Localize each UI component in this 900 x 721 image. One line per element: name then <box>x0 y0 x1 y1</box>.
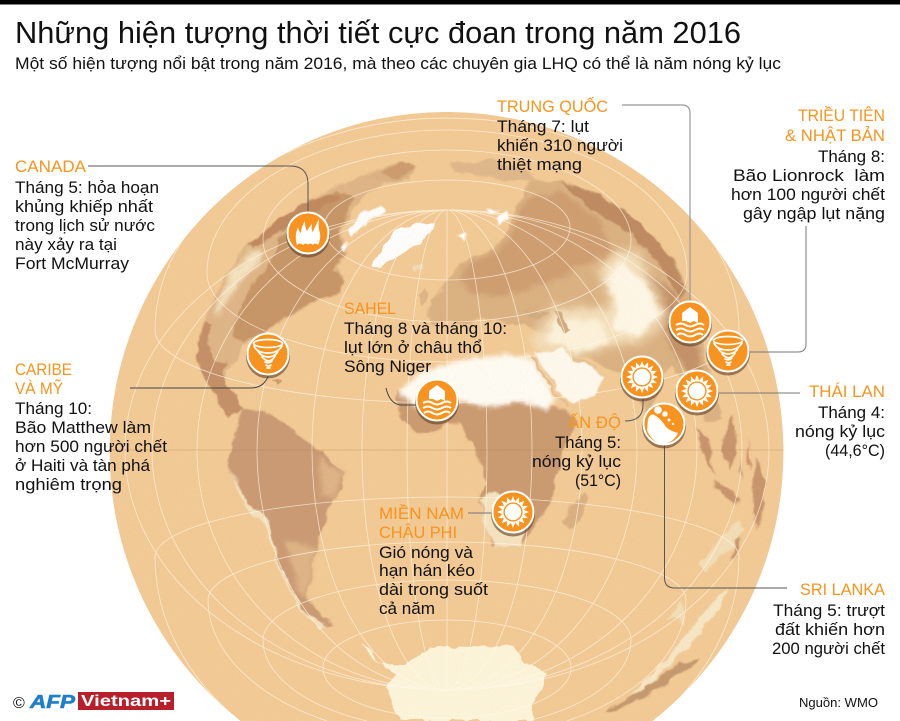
icon: flood China <box>668 302 712 346</box>
text block: Thailand: (44,6°C) <box>825 442 885 460</box>
text block: Caribbean and USA: Bão Matthew làm <box>15 419 151 437</box>
text block: Caribbean and USA: hơn 500 người chết <box>15 438 167 456</box>
text block: Thailand: Tháng 4: <box>818 404 885 422</box>
text block: Sahel: Tháng 8 và tháng 10: <box>344 320 507 338</box>
land masses <box>197 160 765 721</box>
text block: Canada: Fort McMurray <box>15 255 130 273</box>
logo: AFP Vietnam+: AFP <box>29 692 76 712</box>
text block: Thailand: THÁI LAN <box>809 382 885 401</box>
text block: Caribbean and USA <box>15 361 167 494</box>
connector lines <box>88 105 806 588</box>
text block: North Korea and Japan <box>731 106 885 223</box>
text block: Thailand <box>795 382 885 460</box>
Indonesia and the Philippines <box>695 413 765 530</box>
text block: Caribbean and USA: nghiêm trọng <box>15 476 122 494</box>
text block: North Korea and Japan: gây ngập lụt nặng <box>743 205 885 223</box>
icon: wildfire Canada <box>286 212 330 258</box>
globe map <box>100 110 800 721</box>
text block: India: (51°C) <box>575 472 621 490</box>
text block: North Korea and Japan: Bão Lionrock làm <box>733 167 885 185</box>
subtitle: Một số hiện tượng nổi bật trong năm 2016, mà theo các chuyên gia LHQ có thể là năm nóng kỷ lục <box>15 54 782 73</box>
text block: India: nóng kỷ lục <box>532 453 621 471</box>
top black bar <box>0 0 900 4</box>
icon: landslide Sri Lanka <box>642 404 686 448</box>
text block: Thailand: nóng kỷ lục <box>795 423 885 441</box>
Australia and southern limb <box>606 520 744 712</box>
text block: Caribbean and USA: VÀ MỸ <box>15 378 63 398</box>
text block: Southern Africa: Gió nóng và <box>379 544 474 562</box>
text block: Southern Africa: MIỀN NAM <box>379 504 464 523</box>
text block: Caribbean and USA: CARIBE <box>15 361 72 379</box>
text block: Sri Lanka: 200 người chết <box>772 640 885 658</box>
text block: North Korea and Japan: TRIỀU TIÊN <box>798 106 885 125</box>
icon: sun India <box>620 356 664 402</box>
text block: China: khiến 310 người <box>497 137 623 155</box>
logo: AFP Vietnam+: © <box>13 695 25 712</box>
graticule <box>125 118 769 721</box>
text block: Caribbean and USA: ở Haiti và tàn phá <box>15 457 151 475</box>
text block: Southern Africa <box>379 504 488 618</box>
logo: AFP Vietnam+: Vietnam+ <box>81 693 171 710</box>
Arabia <box>531 350 603 408</box>
text block: Sahel: Sông Niger <box>344 358 432 376</box>
Greenland and Arctic ice <box>340 205 510 272</box>
icon: tornado Korea Japan <box>706 330 750 376</box>
text block: Southern Africa: hạn hán kéo <box>379 562 475 580</box>
text block: Canada: Tháng 5: hỏa hoạn <box>15 179 159 197</box>
text block: Canada: CANADA <box>15 158 86 176</box>
text block: Southern Africa: CHÂU PHI <box>379 523 457 542</box>
Eurasia <box>367 160 722 420</box>
text block: Southern Africa: dài trong suốt <box>379 581 488 599</box>
logo: AFP Vietnam+ <box>13 692 174 712</box>
text block: India: Tháng 5: <box>555 434 621 452</box>
text block: Sahel: lụt lớn ở châu thổ <box>344 339 482 357</box>
text block: India: ẤN ĐỘ <box>568 413 621 432</box>
icon: sun Thailand <box>675 370 719 416</box>
text block: China: TRUNG QUỐC <box>497 96 608 116</box>
text block: China: Tháng 7: lụt <box>497 118 589 136</box>
Africa <box>397 356 589 548</box>
icon: tornado Caribbean <box>246 334 290 378</box>
text block: North Korea and Japan: hơn 100 người chết <box>731 186 885 204</box>
text block: Canada: này xảy ra tại <box>15 236 117 254</box>
text block: Sri Lanka: đất khiến hơn <box>775 621 885 639</box>
icon: flood Sahel <box>415 380 459 424</box>
text block: Canada: trong lịch sử nước <box>15 217 155 235</box>
text block: Sri Lanka: SRI LANKA <box>800 581 885 599</box>
text block: Caribbean and USA: Tháng 10: <box>15 400 92 418</box>
text block: Southern Africa: cả năm <box>379 600 435 618</box>
text block: China: thiệt mạng <box>497 156 582 174</box>
text block: North Korea and Japan: Tháng 8: <box>818 148 885 166</box>
source note: Nguồn: WMO <box>799 695 878 710</box>
text block: China <box>497 96 623 174</box>
Antarctica <box>363 643 547 721</box>
title: Những hiện tượng thời tiết cực đoan trong năm 2016 <box>15 15 741 50</box>
text block: Sri Lanka: Tháng 5: trượt <box>773 602 885 620</box>
icon: sun South Africa <box>491 492 535 536</box>
Central Asia deserts <box>525 250 667 369</box>
North America <box>197 162 410 417</box>
text block: Sri Lanka <box>772 581 885 658</box>
text block: Sahel: SAHEL <box>344 300 396 318</box>
text block: Canada: khủng khiếp nhất <box>15 198 153 216</box>
text block: Canada <box>15 158 159 273</box>
text block: Sahel <box>344 300 507 376</box>
South America <box>227 410 345 628</box>
text block: India <box>532 413 621 490</box>
text block: North Korea and Japan: & NHẬT BẢN <box>785 126 885 145</box>
